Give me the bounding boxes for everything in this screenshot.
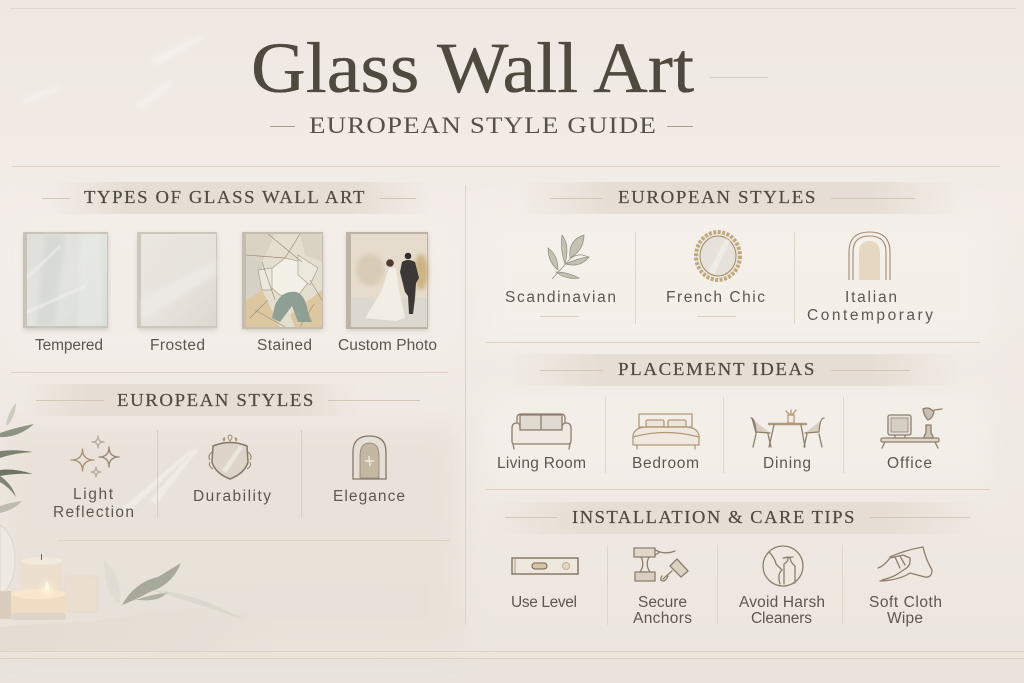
label: bedroom: Bedroom xyxy=(632,455,699,472)
panel: installation and care tips xyxy=(490,502,980,627)
card: custom photo xyxy=(338,232,437,354)
heading: installation xyxy=(490,502,980,534)
label: scandinavian: Scandinavian xyxy=(505,289,616,306)
decoration: marble shelf xyxy=(0,608,290,651)
card: frosted xyxy=(137,232,217,354)
heading: installation: INSTALLATION & CARE TIPS xyxy=(572,507,856,527)
panel: left european styles xyxy=(20,384,420,521)
icon: office desk xyxy=(881,408,942,448)
icon: spirit level xyxy=(512,558,578,574)
label: italian contemporary xyxy=(807,289,933,324)
label: french chic: French Chic xyxy=(666,289,765,306)
icon: double arch door xyxy=(849,232,890,280)
decoration: foreground leaves xyxy=(104,560,245,620)
panel: types of glass wall art xyxy=(23,182,437,354)
label: soft cloth wipe xyxy=(869,594,942,627)
panel: right european styles xyxy=(505,182,960,324)
title: Glass Wall Art xyxy=(251,28,694,108)
heading: types xyxy=(42,182,430,214)
icon: drill and anchors xyxy=(634,548,688,581)
heading: european styles right: EUROPEAN STYLES xyxy=(618,187,817,207)
decoration: vase xyxy=(0,525,15,595)
icon: sofa xyxy=(512,414,571,449)
label: elegance: Elegance xyxy=(333,488,405,505)
decoration: candles xyxy=(0,554,98,620)
icon: avoid cleaners xyxy=(763,546,803,586)
label: secure anchors: Anchors xyxy=(633,610,692,627)
label: custom photo: Custom Photo xyxy=(338,337,437,354)
icon: bed xyxy=(633,414,699,449)
label: soft cloth wipe: Soft Cloth xyxy=(869,594,942,611)
label: avoid harsh cleaners: Cleaners xyxy=(751,610,812,627)
label: italian contemporary: Contemporary xyxy=(807,307,933,324)
label: scandinavian xyxy=(505,289,616,316)
label: durability: Durability xyxy=(193,488,271,505)
label: avoid harsh cleaners: Avoid Harsh xyxy=(739,594,825,611)
icon: hand and cloth xyxy=(878,547,932,581)
label: living room: Living Room xyxy=(497,455,586,472)
decoration: plant, candles and shelf xyxy=(0,403,290,651)
label: office: Office xyxy=(887,455,932,472)
subtitle: EUROPEAN STYLE GUIDE xyxy=(309,113,657,138)
label: use level: Use Level xyxy=(511,594,577,611)
icon: arch xyxy=(353,436,386,479)
icon: dining set xyxy=(751,410,824,447)
label: soft cloth wipe: Wipe xyxy=(887,610,923,627)
label: stained: Stained xyxy=(257,337,312,354)
panel: placement ideas xyxy=(497,354,960,473)
title accent line xyxy=(710,76,768,78)
decoration: palm leaves xyxy=(0,403,34,513)
label: avoid harsh cleaners xyxy=(739,594,825,627)
label: italian contemporary: Italian xyxy=(845,289,897,306)
icon: shield xyxy=(209,435,251,479)
icon: leaf sprig xyxy=(548,235,589,279)
label: french chic xyxy=(666,289,765,316)
label: secure anchors: Secure xyxy=(638,594,687,611)
label: secure anchors xyxy=(633,594,692,627)
heading: european styles right xyxy=(520,182,960,214)
card: tempered xyxy=(23,232,108,354)
label: dining: Dining xyxy=(763,455,811,472)
label: light reflection xyxy=(53,486,134,521)
label: tempered: Tempered xyxy=(35,337,103,354)
label: light reflection: Reflection xyxy=(53,504,134,521)
icon: ornate mirror xyxy=(696,232,740,280)
label: light reflection: Light xyxy=(73,486,114,503)
icon: sparkles xyxy=(71,436,119,477)
heading: european styles left: EUROPEAN STYLES xyxy=(117,390,315,410)
heading: european styles left xyxy=(20,384,420,416)
heading: types: TYPES OF GLASS WALL ART xyxy=(84,187,366,207)
label: frosted: Frosted xyxy=(150,337,205,354)
card: stained glass xyxy=(242,232,323,354)
heading: placement ideas xyxy=(510,354,960,386)
heading: placement ideas: PLACEMENT IDEAS xyxy=(618,359,816,379)
